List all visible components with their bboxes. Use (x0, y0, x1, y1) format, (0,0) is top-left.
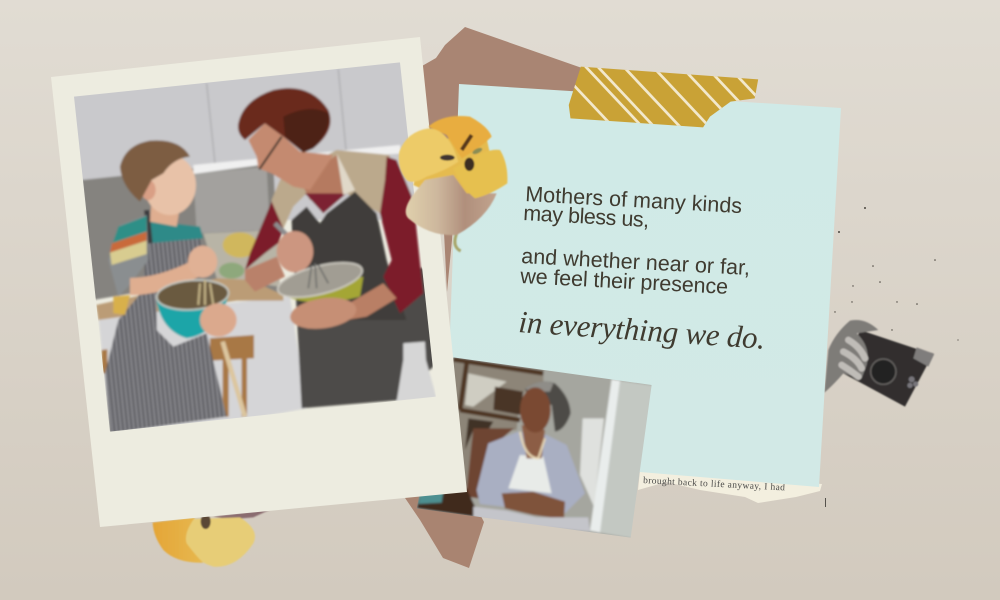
small black tick (825, 498, 826, 507)
photo: grandmother and boy baking (70, 60, 440, 433)
teal book (418, 491, 443, 504)
light wall patch (465, 373, 507, 407)
notebook (473, 507, 590, 532)
hair (525, 382, 571, 432)
icon: hand holding camera (824, 320, 934, 407)
boy lower hand (200, 303, 237, 337)
counter (96, 278, 283, 320)
right petal (183, 517, 255, 567)
book page text: brought back to life anyway, I had (643, 475, 785, 493)
left yellow petal (399, 128, 458, 182)
cardigan (477, 432, 585, 513)
panel: blue note paper (445, 84, 841, 487)
brown torn paper: bottom (403, 495, 484, 568)
hands (502, 492, 565, 519)
collar (337, 153, 355, 195)
grandmother cardigan (272, 150, 390, 228)
right sleeve (380, 157, 423, 313)
chair (210, 335, 254, 361)
camera viewfinder (913, 347, 934, 367)
quote line 3: and whether near or far, (521, 244, 751, 280)
quote line 4: we feel their presence (519, 264, 729, 299)
quote line 1: Mothers of many kinds (525, 182, 743, 218)
paper specks (834, 207, 959, 341)
boy hand (188, 246, 217, 278)
flower centre marks (440, 155, 455, 161)
lower cabinets (98, 297, 307, 433)
glasses (259, 137, 282, 169)
grandmother figure (238, 88, 440, 408)
right yellow petal (453, 150, 507, 198)
backsplash (82, 162, 280, 300)
left sleeve (245, 202, 283, 270)
washi tape (568, 66, 758, 128)
lower apron (295, 267, 440, 408)
camera body (843, 330, 933, 407)
face (520, 387, 551, 433)
shelf glow (203, 230, 280, 287)
lower hand (288, 294, 358, 333)
green bowl (280, 277, 363, 303)
camera lens (871, 359, 896, 384)
bottle (397, 342, 437, 402)
upper cabinets (70, 60, 440, 220)
torn book page strip (638, 470, 822, 503)
boy whisk (198, 280, 213, 305)
chair (466, 428, 514, 498)
whisk wires (308, 263, 328, 288)
top orange petal (428, 116, 492, 158)
boy ear (141, 180, 156, 200)
face (248, 123, 333, 190)
hair (238, 88, 330, 153)
whisk handle (275, 223, 288, 237)
brown torn paper: top (422, 27, 582, 292)
flower centre (201, 514, 211, 529)
wall (413, 353, 657, 543)
necklace (520, 432, 545, 458)
white top (508, 455, 552, 493)
bottom flower (153, 509, 271, 567)
shelf frames (453, 359, 543, 420)
window frame (590, 379, 621, 533)
lower forearm (343, 283, 397, 320)
under cabinet light (193, 145, 402, 174)
stem (455, 233, 461, 251)
left forearm (245, 257, 285, 292)
top pansy flower (399, 116, 507, 251)
quote text (518, 182, 766, 356)
boy shirt (145, 220, 203, 243)
boy apron (105, 227, 227, 433)
camera buttons (907, 376, 918, 388)
boy hair (120, 140, 190, 202)
grandmother neck (300, 155, 347, 200)
boy neck (150, 200, 180, 227)
upper hand (277, 231, 313, 272)
apron strap (147, 210, 150, 243)
desk shadow (417, 488, 476, 516)
petal base (413, 138, 497, 205)
teal bowl (156, 293, 229, 338)
quote line 5: script: in everything we do. (518, 304, 766, 356)
door (580, 418, 604, 507)
purple petal (213, 509, 271, 519)
photo: woman at desk (413, 353, 657, 543)
apron bib (292, 192, 407, 320)
left petal (153, 517, 203, 563)
hand (824, 320, 878, 393)
left wall with shelves (454, 360, 544, 489)
boy face (144, 155, 196, 215)
quote line 2: may bless us, (523, 201, 650, 232)
neck (522, 425, 545, 458)
boy sleeve (108, 215, 148, 297)
bottom mauve petal (406, 175, 497, 235)
fingers (842, 340, 865, 377)
boy arm (130, 268, 197, 287)
fruit (223, 232, 257, 258)
polaroid frame (51, 37, 467, 527)
wooden spoon (223, 342, 245, 417)
